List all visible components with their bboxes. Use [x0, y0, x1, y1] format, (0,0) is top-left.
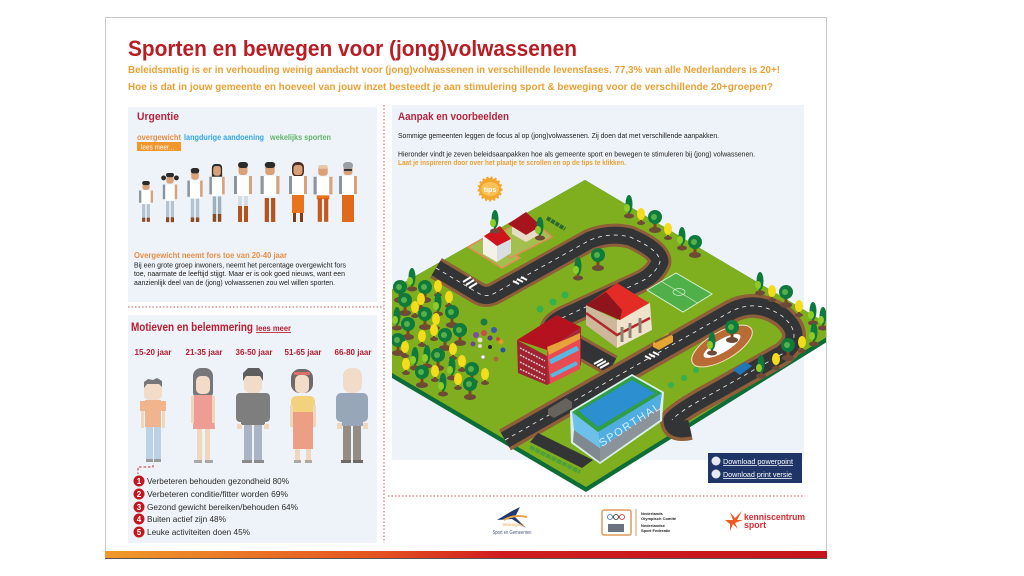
houses	[483, 212, 541, 262]
motives list: 2	[137, 490, 142, 499]
motives list: Verbeteren behouden gezondheid 80%	[147, 476, 289, 486]
text block: overgewicht: Bij een grote groep inwoners, neemt het percentage overgewicht fors	[134, 260, 346, 270]
logo: kenniscentrum sport: sport	[744, 520, 766, 530]
running track	[691, 324, 753, 368]
figure: 21-35	[191, 368, 215, 463]
motives list: Gezond gewicht bereiken/behouden 64%	[147, 502, 298, 512]
subtitle	[128, 64, 780, 93]
age labels: 51-65 jaar	[285, 348, 321, 357]
logo: sport en gemeenten	[492, 507, 532, 536]
sporthal	[570, 374, 664, 464]
dashed connector	[138, 465, 153, 474]
map ground	[380, 180, 838, 492]
figure: 36-50	[236, 368, 270, 463]
logo: NOC*NSF: Nederlandse	[641, 523, 666, 528]
slide frame	[106, 18, 826, 558]
motives list: 1	[137, 477, 142, 486]
bushes	[536, 292, 699, 388]
button: lees meer	[137, 142, 181, 152]
heading: motieven: lees meer	[256, 323, 292, 333]
age labels: 15-20 jaar	[135, 348, 171, 357]
heading: motieven: Motieven en belemmering	[131, 322, 253, 334]
crowd	[470, 318, 506, 362]
bottom gradient bar	[105, 551, 827, 559]
panel: motieven en belemmering	[128, 315, 377, 543]
motives list: Verbeteren conditie/fitter worden 69%	[147, 489, 288, 499]
figure: 51-65	[290, 369, 316, 463]
people row	[139, 162, 357, 222]
logo: NOC*NSF: Nederlands	[641, 511, 664, 516]
text block: overgewicht: aanzienlijk deel van de (jong) volwassenen zou wel willen sporten.	[134, 278, 335, 287]
text block: overgewicht: Overgewicht neemt fors toe van 20-40 jaar	[134, 251, 287, 260]
logo: sport en gemeenten: Sport en Gemeenten	[492, 530, 532, 536]
road: upper winding road	[436, 235, 660, 366]
age labels: 36-50 jaar	[236, 348, 272, 357]
legend	[137, 133, 331, 142]
legend: langdurige aandoening	[184, 133, 264, 142]
motives list: Buiten actief zijn 48%	[147, 514, 226, 524]
motives list	[134, 476, 298, 538]
logo: NOC*NSF: Olympisch Comité	[641, 516, 677, 521]
red office building	[517, 315, 581, 385]
vehicles	[548, 333, 752, 418]
logo: NOC*NSF	[602, 509, 677, 536]
crosswalks	[463, 277, 659, 368]
hedge	[547, 218, 565, 229]
road: lower winding road	[505, 306, 794, 440]
title: Sporten en bewegen voor (jong)volwassenen	[128, 36, 577, 61]
motives list: 4	[137, 515, 142, 524]
trees	[391, 195, 828, 400]
soccer field	[647, 273, 712, 312]
panel: urgentie	[128, 107, 377, 302]
panel: aanpak en voorbeelden	[392, 105, 804, 460]
logo: sport en gemeenten: Vereniging	[502, 522, 524, 527]
cream building	[586, 283, 652, 348]
dotted dividers	[128, 105, 805, 543]
button: lees meer: lees meer...	[141, 144, 174, 152]
heading: aanpak: Aanpak en voorbeelden	[398, 111, 509, 123]
heading: urgentie: Urgentie	[137, 111, 179, 123]
age labels: 66-80 jaar	[335, 348, 371, 357]
logo: kenniscentrum sport: kenniscentrum	[744, 512, 805, 522]
motives list: 5	[137, 528, 142, 537]
icon: download print	[712, 470, 720, 478]
subtitle: Beleidsmatig is er in verhouding weinig aandacht voor (jong)volwassenen in verschillende levensfases. 77,3% van alle Nederlanders is 20+!	[128, 64, 780, 76]
age labels	[135, 348, 371, 357]
figure: 66-80	[336, 368, 368, 463]
subtitle: Hoe is dat in jouw gemeente en hoeveel van jouw inzet besteedt je aan stimulering sport & beweging voor de verschillende 20+groepen?	[128, 81, 773, 93]
logo: NOC*NSF: Sport Federatie	[641, 528, 671, 533]
icon: download powerpoint	[712, 456, 720, 466]
icon: tips sun: tips	[484, 187, 496, 194]
logo: kenniscentrum sport	[725, 511, 805, 531]
legend: overgewicht	[137, 133, 181, 142]
text block: overgewicht	[134, 251, 346, 287]
text block: overgewicht: toe, naarmate de leeftijd stijgt. Maar er is ook goed nieuws, want een	[134, 269, 345, 278]
motives list: Leuke activiteiten doen 45%	[147, 527, 250, 537]
intro text	[398, 131, 755, 167]
legend: wekelijks sporten	[269, 133, 331, 142]
intro text: Sommige gemeenten leggen de focus al op (jong)volwassenen. Zij doen dat met verschillende aanpakken.	[398, 131, 719, 140]
sporthal label: SPORTHAL	[597, 401, 662, 450]
link: download print: Download print versie	[723, 470, 792, 479]
age labels: 21-35 jaar	[186, 348, 222, 357]
icon: tips sun	[479, 178, 501, 200]
motives list: 3	[137, 503, 142, 512]
intro text: Hieronder vindt je zeven beleidsaanpakken hoe als gemeente sport en bewegen te stimuleren bij (jong) volwassenen.	[398, 150, 755, 158]
figure: 15-20	[140, 378, 166, 462]
building lots	[466, 226, 554, 269]
download buttons	[708, 453, 802, 483]
parking and hedge	[530, 433, 593, 472]
intro text: Laat je inspireren door over het plaatje te scrollen en op de tips te klikken.	[398, 158, 626, 167]
link: download powerpoint: Download powerpoint	[723, 457, 794, 466]
isometric town map	[380, 180, 838, 492]
